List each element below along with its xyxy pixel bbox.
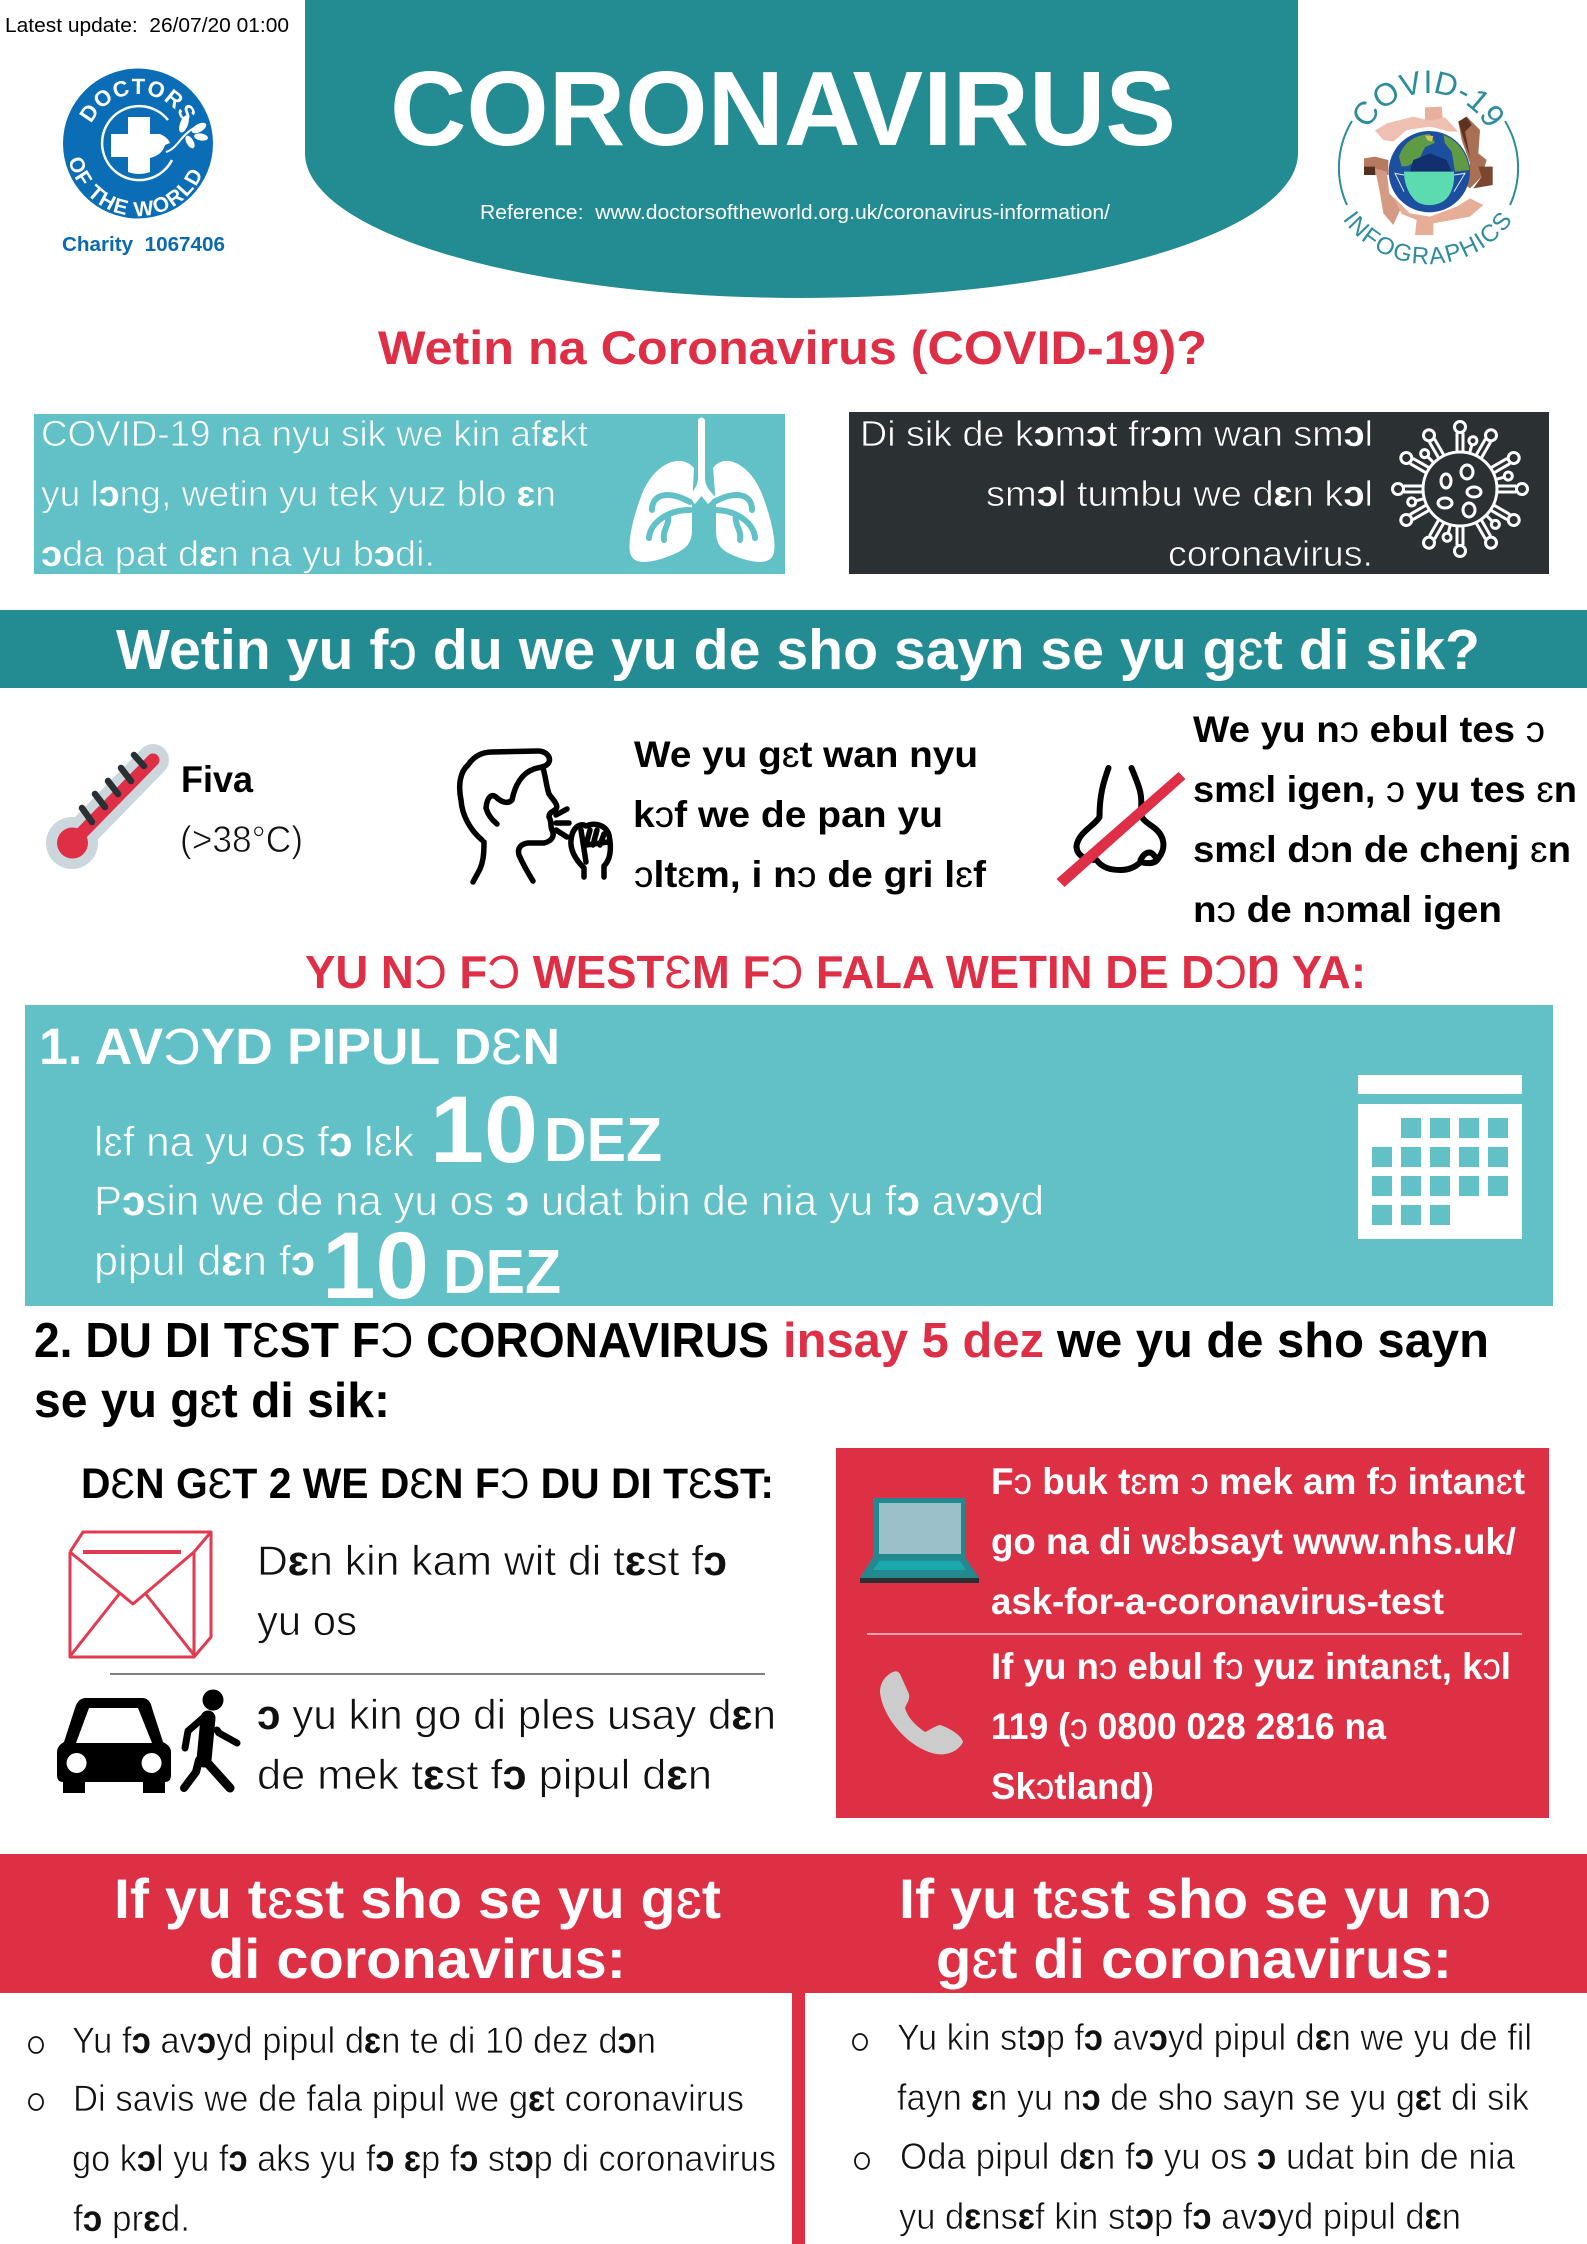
isolation text with 10 days [94, 1077, 662, 1183]
banner: test results [0, 1854, 1587, 1993]
smell description [1193, 709, 1577, 930]
smell description: smɛl igen, ɔ yu tes ɛn [1193, 769, 1577, 810]
list: positive result advice: Di savis we de fala pipul we gɛt coronavirus [73, 2078, 744, 2119]
household text with 10 days: 10 [322, 1213, 429, 1319]
logo: Doctors of the World [63, 68, 213, 218]
panel: how to book a test [836, 1448, 1549, 1818]
smell description: smɛl dɔn de chenj ɛn [1193, 829, 1571, 870]
household text with 10 days [94, 1177, 1044, 1319]
update timestamp: Latest update: 26/07/20 01:00 [5, 15, 289, 37]
banner: symptoms question: Wetin yu fɔ du we yu de sho sayn se yu gɛt di sik? [116, 618, 1480, 682]
icon: walking person [184, 1690, 237, 1788]
symptom: cough [460, 734, 987, 895]
online booking text [991, 1461, 1525, 1622]
logo: COVID-19 infographics: COVID-19 [1354, 70, 1503, 125]
step 2 heading: we yu de sho sayn [1056, 1314, 1489, 1368]
virus description: smɔl tumbu we d ɛn kɔl [986, 473, 1373, 514]
charity number: Charity 1067406 [62, 234, 225, 256]
list: negative result advice [853, 2017, 1532, 2237]
household text with 10 days: pipul dɛn fɔ [94, 1237, 315, 1284]
cough description: ɔltɛm, i nɔ de gri lɛf [634, 854, 987, 895]
icon: car [57, 1698, 171, 1793]
online booking text: ask-for-a-coronavirus-test [991, 1581, 1444, 1622]
test site text: de mek tɛst fɔ pipul dɛn [257, 1751, 712, 1798]
test site text [257, 1691, 776, 1798]
icon: envelope box [70, 1532, 211, 1657]
heading: what is coronavirus: Wetin na Coronavirus (COVID-19)? [378, 321, 1207, 374]
step 1 heading: 1. AVƆYD PIPUL DƐN [39, 1018, 560, 1075]
virus description [860, 413, 1373, 574]
negative result heading [899, 1867, 1491, 1990]
icon: thermometer [46, 755, 153, 869]
list: negative result advice: fayn ɛn yu nɔ de sho sayn se yu gɛt di sik [897, 2077, 1529, 2118]
title: CORONAVIRUS [390, 50, 1176, 168]
lungs description [41, 413, 588, 574]
test site text: ɔ yu kin go di ples usay dɛn [257, 1691, 776, 1738]
online booking text: go na di wɛbsayt www.nhs.uk/ [991, 1521, 1516, 1562]
symptom: loss of smell [1056, 709, 1577, 930]
smell description: We yu nɔ ebul tes ɔ [1193, 709, 1545, 750]
logo: Doctors of the World: OF THE WORLD [70, 158, 200, 216]
lungs description: COVID-19 na nyu sik we kin af ɛkt [41, 413, 588, 454]
household text with 10 days: DEZ [443, 1238, 561, 1307]
home test text: yu os [257, 1597, 357, 1644]
logo: COVID-19 infographics [1338, 70, 1520, 264]
positive result heading [114, 1867, 721, 1990]
cough description: We yu gɛt wan nyu [634, 734, 978, 775]
isolation text with 10 days: 10 [430, 1077, 538, 1183]
phone booking text: If yu nɔ ebul fɔ yuz intanɛt, kɔl [991, 1646, 1511, 1687]
list: positive result advice: go kɔl yu fɔ aks yu fɔ ɛp fɔ stɔp di coronavirus [72, 2138, 776, 2179]
phone booking text: Skɔtland) [991, 1766, 1154, 1807]
symptom: fever [46, 755, 303, 869]
isolation text with 10 days: DEZ [544, 1106, 662, 1175]
panel: virus [849, 412, 1549, 574]
panel: step 1 avoid people [25, 1005, 1553, 1319]
panel: two ways to get tested [57, 1460, 776, 1798]
negative result heading: If yu tɛst sho se yu nɔ [899, 1867, 1491, 1930]
positive result heading: di coronavirus: [209, 1927, 626, 1990]
cough description [633, 734, 987, 895]
positive result heading: If yu tɛst sho se yu gɛt [114, 1867, 721, 1930]
icon: lungs [630, 418, 774, 562]
step 2 heading: 2. DU DI TƐST FƆ CORONAVIRUS [34, 1314, 769, 1368]
icon: virus [1392, 422, 1528, 556]
isolation text with 10 days: lɛf na yu os fɔ lɛk [94, 1118, 415, 1165]
fever label: Fiva [181, 759, 253, 800]
online booking text: Fɔ buk tɛm ɔ mek am fɔ intanɛt [991, 1461, 1525, 1502]
icon: nose with slash [1056, 768, 1186, 887]
icon: laptop [860, 1498, 979, 1583]
home test text [257, 1537, 727, 1644]
list: positive result advice: Yu fɔ avɔyd pipul dɛn te di 10 dez dɔn [72, 2020, 656, 2061]
list: negative result advice: Oda pipul dɛn fɔ yu os ɔ udat bin de nia [900, 2136, 1515, 2177]
lungs description: ɔda pat dɛn na yu bɔdi. [41, 533, 435, 574]
panel: lungs [34, 413, 785, 574]
icon: calendar [1358, 1075, 1522, 1239]
list: negative result advice: Yu kin stɔp fɔ avɔyd pipul dɛn we yu de fil [897, 2017, 1532, 2058]
household text with 10 days: Pɔsin we de na yu os ɔ udat bin de nia yu fɔ avɔyd [94, 1177, 1044, 1224]
list: positive result advice [29, 2020, 776, 2239]
two ways heading: DƐN GƐT 2 WE DƐN FƆ DU DI TƐST: [81, 1460, 774, 1508]
fever temperature: (>38°C) [180, 819, 303, 860]
lungs description: yu lɔng, wetin yu tek yuz blo ɛn [41, 473, 556, 514]
virus description: coronavirus. [1168, 533, 1373, 574]
cough description: kɔf we de pan yu [633, 794, 943, 835]
logo: Doctors of the World: DOCTORS [79, 78, 195, 122]
step 2 heading: insay 5 dez [783, 1314, 1044, 1368]
list: positive result advice: fɔ prɛd. [73, 2198, 190, 2239]
smell description: nɔ de nɔmal igen [1193, 889, 1502, 930]
list: negative result advice: yu dɛnsɛf kin stɔp fɔ avɔyd pipul dɛn [899, 2196, 1461, 2237]
step 2 heading: se yu gɛt di sik: [34, 1374, 390, 1428]
header banner with title [305, 0, 1298, 298]
logo: COVID-19 infographics: INFOGRAPHICS [1344, 211, 1510, 264]
icon: telephone [880, 1671, 963, 1754]
reference link: Reference: www.doctorsoftheworld.org.uk/coronavirus-information/ [480, 202, 1110, 224]
negative result heading: gɛt di coronavirus: [936, 1927, 1452, 1990]
virus description: Di sik de kɔmɔt frɔm wan smɔl [860, 413, 1373, 454]
phone booking text: 119 (ɔ 0800 028 2816 na [991, 1706, 1386, 1747]
step 2 heading [34, 1314, 1489, 1428]
home test text: Dɛn kin kam wit di tɛst fɔ [257, 1537, 727, 1584]
phone booking text [991, 1646, 1511, 1807]
icon: coughing person [460, 751, 610, 882]
heading: follow these steps: YU NƆ FƆ WESTƐM FƆ FALA WETIN DE DƆŊ YA: [305, 946, 1366, 998]
